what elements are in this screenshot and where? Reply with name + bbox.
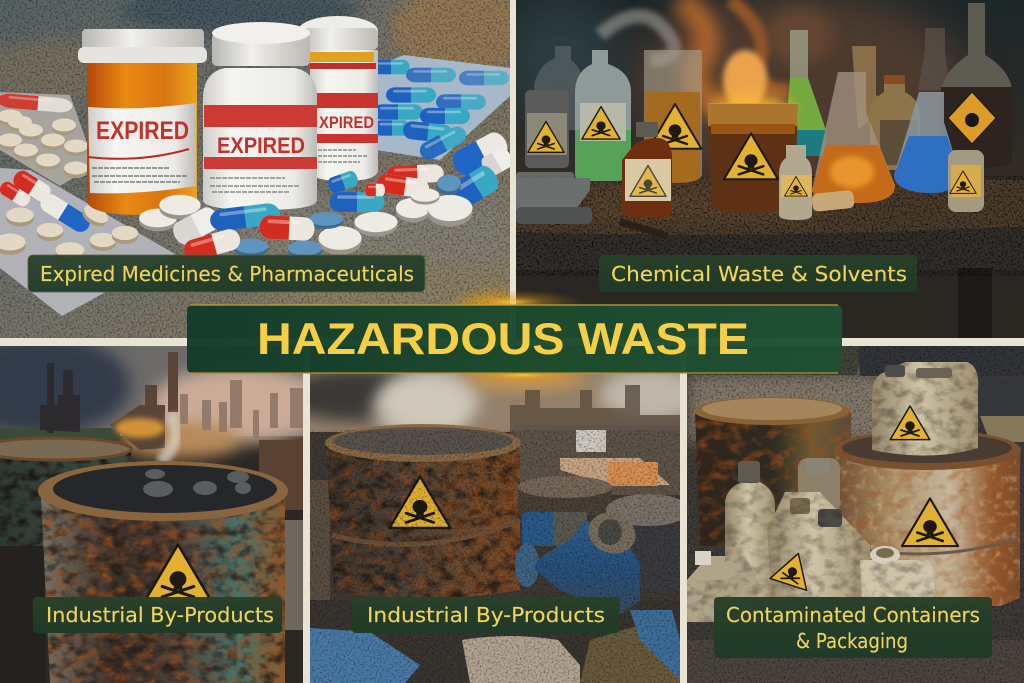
caption: contaminated containers: Contaminated Containers <box>726 603 980 627</box>
banner glow <box>443 290 592 384</box>
main rusted barrel <box>325 424 521 605</box>
main sludge barrel <box>38 461 288 683</box>
blister pack: lower left <box>0 168 175 316</box>
debris texture <box>310 430 680 683</box>
white jerrycan on top <box>870 360 980 460</box>
white pill bottle <box>203 22 317 210</box>
factory skyline <box>510 385 680 440</box>
blue toppled drum <box>534 506 641 615</box>
plastic jugs <box>687 458 987 625</box>
panel: industrial by-products centre <box>310 374 680 683</box>
foreground containers <box>310 610 680 683</box>
rear pill bottle: XPIRED <box>319 113 374 132</box>
rear pill bottle <box>298 16 378 181</box>
left rusty barrel <box>694 397 851 546</box>
caption: medicines: Expired Medicines & Pharmaceuticals <box>40 262 414 286</box>
caption: industrial left: Industrial By-Products <box>46 603 274 627</box>
rear small barrels <box>515 476 690 590</box>
caption: contaminated containers: & Packaging <box>796 629 908 653</box>
white pill bottle: EXPIRED <box>217 133 305 158</box>
chemical bottles <box>516 3 1012 214</box>
panel: contaminated containers <box>687 345 1024 683</box>
steam <box>372 380 468 440</box>
caption: contaminated containers <box>714 597 992 658</box>
steam <box>160 415 176 462</box>
refinery skyline <box>40 352 303 450</box>
title: HAZARDOUS WASTE <box>257 315 749 364</box>
scattered pills <box>139 123 515 263</box>
blister pack: upper right <box>372 55 510 160</box>
glowing beaker <box>708 96 798 213</box>
panel: expired medicines <box>0 0 540 350</box>
caption: chemical waste: Chemical Waste & Solvents <box>611 262 907 286</box>
amber jar <box>622 122 672 218</box>
small bottle and cork <box>779 145 855 220</box>
caption: industrial centre <box>352 597 620 633</box>
conical flask <box>812 72 895 203</box>
caption: industrial left <box>33 597 282 633</box>
blister pack: upper left <box>0 92 95 186</box>
panel: chemical waste <box>500 0 1024 338</box>
rear barrel <box>0 436 303 597</box>
rear bottles <box>534 28 950 130</box>
stacked glass plates <box>516 178 668 236</box>
caption: medicines <box>28 255 425 292</box>
amber pill bottle: EXPIRED <box>96 117 189 145</box>
title banner <box>187 305 842 373</box>
panel: industrial by-products left <box>0 346 303 683</box>
workbench <box>516 176 1024 338</box>
amber pill bottle <box>78 29 207 215</box>
debris heap <box>310 425 680 683</box>
hazard label <box>146 543 210 597</box>
caption: industrial centre: Industrial By-Products <box>367 603 605 627</box>
right large barrel <box>833 430 1021 606</box>
smoke and flames <box>600 0 834 118</box>
caption: chemical waste <box>599 255 917 292</box>
